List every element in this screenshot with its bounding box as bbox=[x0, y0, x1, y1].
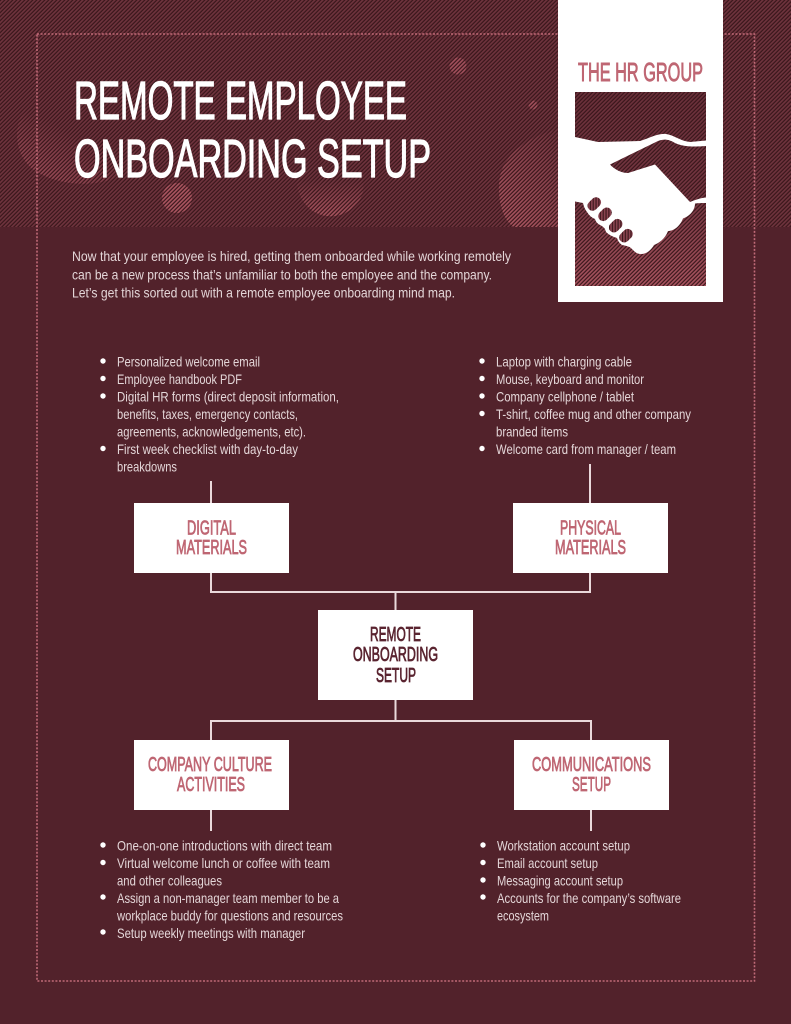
box: remote onboarding setup bbox=[318, 610, 473, 700]
list: physical materials: T-shirt, coffee mug and other company bbox=[496, 406, 691, 422]
title: ONBOARDING SETUP bbox=[74, 129, 431, 189]
list: digital materials: benefits, taxes, emergency contacts, bbox=[117, 406, 298, 422]
box: remote onboarding setup: SETUP bbox=[376, 665, 416, 687]
list: physical materials: Laptop with charging cable bbox=[496, 354, 632, 370]
box: communications setup: SETUP bbox=[572, 774, 611, 796]
box: company culture activities: ACTIVITIES bbox=[177, 774, 245, 796]
icon: handshake bbox=[575, 92, 706, 286]
list: digital materials: Employee handbook PDF bbox=[117, 371, 242, 387]
list: company culture activities: workplace buddy for questions and resources bbox=[116, 908, 343, 924]
list: digital materials: First week checklist with day-to-day bbox=[117, 441, 298, 457]
list: digital materials: agreements, acknowledgements, etc). bbox=[117, 424, 306, 440]
intro text: can be a new process that’s unfamiliar to both the employee and the company. bbox=[72, 266, 492, 282]
box: company culture activities: COMPANY CULTURE bbox=[148, 754, 272, 776]
title: REMOTE EMPLOYEE bbox=[74, 71, 407, 131]
list: communications setup: Workstation account setup bbox=[497, 838, 630, 854]
logo name: THE HR GROUP bbox=[578, 57, 703, 87]
box: digital materials: DIGITAL bbox=[187, 517, 236, 539]
box: remote onboarding setup: REMOTE bbox=[370, 624, 421, 646]
list: physical materials: branded items bbox=[496, 424, 568, 440]
list: communications setup: Email account setup bbox=[497, 855, 598, 871]
box: physical materials: PHYSICAL bbox=[560, 517, 621, 539]
list: physical materials bbox=[479, 354, 691, 457]
list: communications setup: ecosystem bbox=[497, 908, 549, 924]
box: remote onboarding setup: ONBOARDING bbox=[353, 644, 438, 666]
list: digital materials: Personalized welcome email bbox=[117, 354, 260, 370]
striped header band with blobs bbox=[0, 0, 791, 227]
box: physical materials bbox=[513, 503, 668, 573]
list: company culture activities bbox=[100, 838, 343, 941]
connector lines bbox=[211, 464, 591, 831]
box: physical materials: MATERIALS bbox=[555, 537, 626, 559]
list: company culture activities: Assign a non-manager team member to be a bbox=[117, 890, 339, 906]
list: company culture activities: Virtual welcome lunch or coffee with team bbox=[117, 855, 330, 871]
list: digital materials: Digital HR forms (direct deposit information, bbox=[117, 388, 339, 404]
box: communications setup: COMMUNICATIONS bbox=[532, 754, 651, 776]
box: digital materials: MATERIALS bbox=[176, 537, 247, 559]
list: physical materials: Company cellphone / tablet bbox=[496, 388, 634, 404]
box: digital materials bbox=[134, 503, 289, 573]
box: communications setup bbox=[514, 740, 669, 810]
list: company culture activities: and other colleagues bbox=[117, 872, 222, 888]
panel: company logo bbox=[558, 0, 723, 302]
intro text: Now that your employee is hired, getting them onboarded while working remotely bbox=[72, 248, 511, 264]
list: communications setup: Accounts for the company’s software bbox=[497, 890, 681, 906]
intro text: Let’s get this sorted out with a remote employee onboarding mind map. bbox=[72, 284, 455, 300]
title bbox=[74, 71, 431, 189]
list: physical materials: Welcome card from manager / team bbox=[496, 441, 676, 457]
intro text bbox=[72, 248, 511, 300]
list: physical materials: Mouse, keyboard and monitor bbox=[496, 371, 644, 387]
list: digital materials bbox=[100, 354, 339, 474]
list: communications setup: Messaging account setup bbox=[497, 872, 623, 888]
list: communications setup bbox=[480, 838, 681, 924]
box: company culture activities bbox=[134, 740, 289, 810]
list: company culture activities: One-on-one introductions with direct team bbox=[117, 838, 332, 854]
list: digital materials: breakdowns bbox=[117, 458, 177, 474]
list: company culture activities: Setup weekly meetings with manager bbox=[117, 925, 305, 941]
